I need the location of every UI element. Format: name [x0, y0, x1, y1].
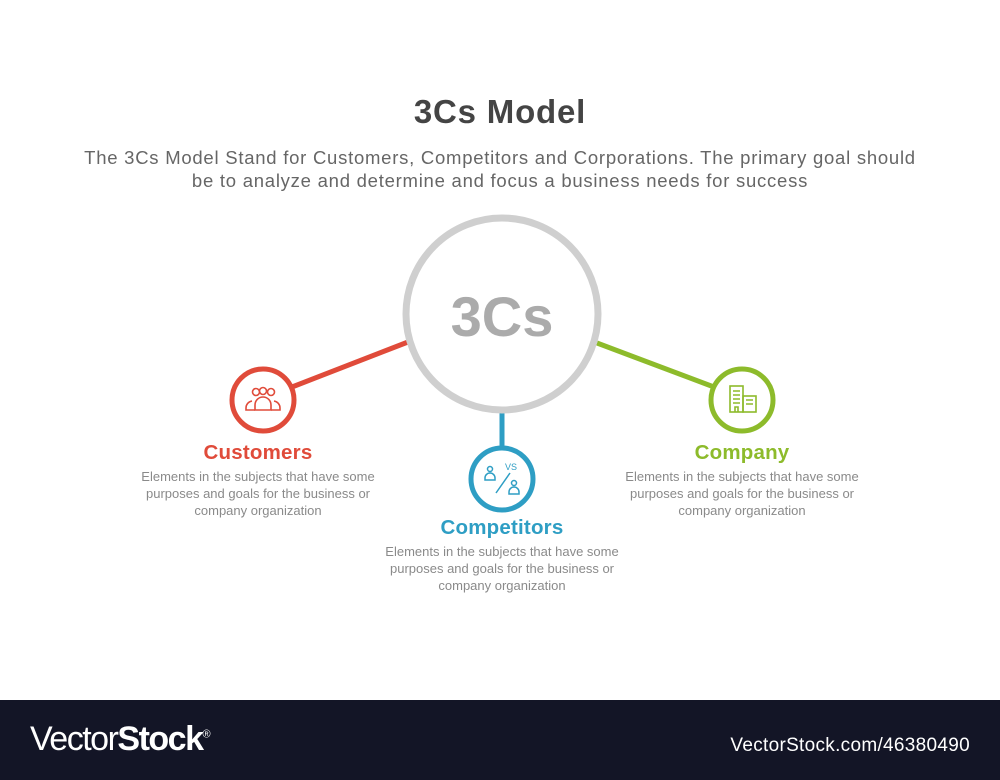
subtitle: be to analyze and determine and focus a business needs for success — [192, 170, 808, 191]
footer url: VectorStock.com/46380490 — [730, 735, 970, 756]
connector: company — [597, 343, 714, 387]
footer bar — [0, 700, 1000, 780]
block: company — [625, 441, 859, 518]
block: competitors — [385, 516, 619, 593]
subtitle: The 3Cs Model Stand for Customers, Competitors and Corporations. The primary goal should — [84, 147, 916, 168]
footer logo: VectorStock® — [30, 720, 209, 758]
connector: competitors — [500, 410, 504, 450]
block: customers: Customers — [204, 441, 312, 464]
block: company: Company — [695, 441, 789, 464]
center circle — [406, 218, 598, 410]
title: 3Cs Model — [414, 93, 586, 130]
subtitle — [84, 147, 916, 191]
icon: competitors — [471, 448, 533, 510]
icon: company — [711, 369, 773, 431]
block: company: Elements in the subjects that have some purposes and goals for the business or company organization — [625, 469, 859, 518]
icon: customers — [232, 369, 294, 431]
block: customers — [141, 441, 375, 518]
block: customers: Elements in the subjects that have some purposes and goals for the business or company organization — [141, 469, 375, 518]
connector: customers — [292, 342, 408, 387]
block: competitors: Elements in the subjects that have some purposes and goals for the business or company organization — [385, 544, 619, 593]
center circle: 3Cs — [451, 285, 553, 348]
icon: competitors: VS — [505, 462, 517, 472]
block: competitors: Competitors — [441, 516, 563, 539]
